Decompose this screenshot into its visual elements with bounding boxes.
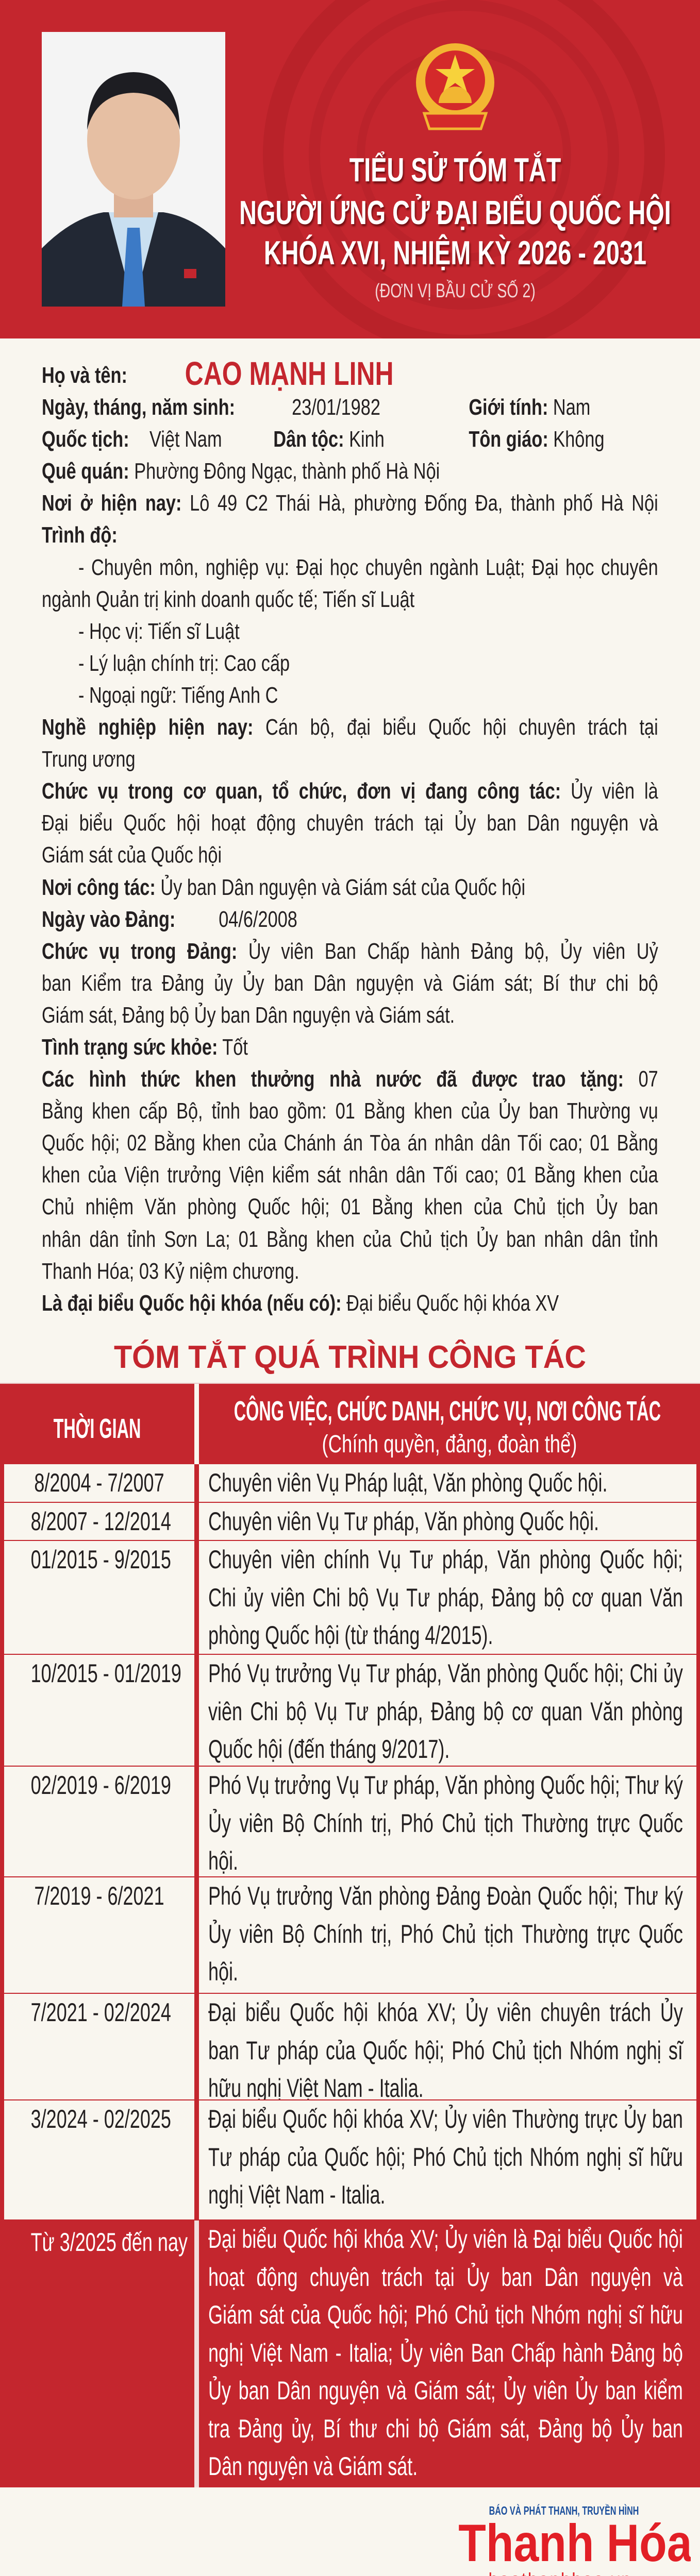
row 6: hội.: [208, 1957, 238, 1986]
row 6: [4, 1877, 696, 1994]
row 9: current (highlighted): hoạt động chuyên trách tại Ủy ban Dân nguyện và: [208, 2263, 683, 2292]
row 2: [4, 1503, 696, 1541]
row 2: Chuyên viên Vụ Tư pháp, Văn phòng Quốc hội.: [208, 1507, 599, 1536]
row 6: Phó Vụ trưởng Văn phòng Đảng Đoàn Quốc hội; Thư ký: [208, 1882, 683, 1910]
header band: [0, 0, 700, 338]
row 9: current (highlighted): Dân nguyện và Giám sát.: [208, 2452, 418, 2481]
party position: Chức vụ trong Đảng: Ủy viên Ban Chấp hành Đảng bộ, Ủy viên Uỷ: [42, 939, 658, 964]
birth date and gender: 23/01/1982: [292, 395, 380, 420]
party admission date: 04/6/2008: [219, 907, 297, 932]
title: [239, 151, 672, 273]
icon: national emblem: [416, 43, 494, 130]
row 9: current (highlighted): nghị Việt Nam - Italia; Ủy viên Ban Chấp hành Đảng bộ: [208, 2338, 683, 2367]
row 9: current (highlighted): Giám sát của Quốc hội; Phó Chủ tịch Nhóm nghị sĩ hữu: [208, 2300, 683, 2329]
row 9: current (highlighted): Từ 3/2025 đến nay: [31, 2228, 188, 2257]
panel: personal information: [42, 355, 658, 1316]
workplace: Nơi công tác: Ủy ban Dân nguyện và Giám sát của Quốc hội: [42, 875, 525, 900]
nationality, ethnicity, religion: Tôn giáo: Không: [469, 427, 605, 452]
panel: personal information: - Ngoại ngữ: Tiếng Anh C: [78, 683, 278, 708]
name: CAO MẠNH LINH: [185, 355, 394, 392]
row 8: [4, 2100, 696, 2221]
row 6: 7/2019 - 6/2021: [34, 1882, 164, 1910]
table: work history: [0, 1383, 700, 2221]
row 5: hội.: [208, 1846, 238, 1875]
panel: personal information: Thanh Hóa; 03 Kỷ niệm chương.: [42, 1259, 299, 1284]
row 9: current (highlighted): tra Đảng ủy, Bí thư chi bộ Giám sát, Đảng bộ Ủy ban: [208, 2414, 683, 2443]
title: KHÓA XVI, NHIỆM KỲ 2026 - 2031: [264, 234, 646, 272]
row 3: Chi ủy viên Chi bộ Vụ Tư pháp, Đảng bộ cơ quan Văn: [208, 1583, 683, 1612]
subtitle: electoral unit: (ĐƠN VỊ BẦU CỬ SỐ 2): [375, 280, 536, 302]
panel: personal information: Chủ nhiệm Văn phòng Quốc hội; 01 Bằng khen của Chủ tịch Ủy ban: [42, 1194, 658, 1219]
row 5: Phó Vụ trưởng Vụ Tư pháp, Văn phòng Quốc hội; Thư ký: [208, 1771, 683, 1800]
decorative drum circle: [263, 0, 665, 338]
row 9: current (highlighted): [0, 2221, 700, 2487]
row 1: Chuyên viên Vụ Pháp luật, Văn phòng Quốc hội.: [208, 1468, 608, 1497]
health: Tình trạng sức khỏe: Tốt: [42, 1035, 248, 1060]
row 8: Đại biểu Quốc hội khóa XV; Ủy viên Thường trực Ủy ban: [208, 2105, 683, 2133]
panel: personal information: - Chuyên môn, nghiệp vụ: Đại học chuyên ngành Luật; Đại học chuyên: [78, 555, 658, 580]
row 9: current (highlighted): Ủy ban Dân nguyện và Giám sát; Ủy viên Ủy ban kiểm: [208, 2376, 683, 2405]
panel: personal information: Giám sát của Quốc hội: [42, 842, 222, 868]
table header: (Chính quyền, đảng, đoàn thể): [322, 1431, 577, 1458]
row 8: nghị Việt Nam - Italia.: [208, 2180, 385, 2209]
panel: personal information: Giám sát, Đảng bộ Ủy ban Dân nguyện và Giám sát.: [42, 1003, 455, 1028]
name: [42, 355, 394, 392]
row 3: [4, 1541, 696, 1655]
row 7: ban Tư pháp của Quốc hội; Phó Chủ tịch Nhóm nghị sĩ: [208, 2036, 683, 2065]
heading: work history: TÓM TẮT QUÁ TRÌNH CÔNG TÁC: [114, 1340, 586, 1375]
position: Chức vụ trong cơ quan, tổ chức, đơn vị đang công tác: Ủy viên là: [42, 778, 658, 804]
nationality, ethnicity, religion: [42, 427, 605, 452]
photo: candidate portrait: [42, 32, 225, 307]
hometown: Quê quán: Phường Đông Ngạc, thành phố Hà Nội: [42, 459, 440, 484]
row 7: Đại biểu Quốc hội khóa XV; Ủy viên chuyên trách Ủy: [208, 1998, 683, 2027]
table body borders: [0, 1464, 4, 2222]
education: Trình độ:: [42, 522, 118, 548]
row 4: 10/2015 - 01/2019: [31, 1659, 181, 1688]
title: NGƯỜI ỨNG CỬ ĐẠI BIỂU QUỐC HỘI: [239, 194, 671, 231]
row 4: [4, 1655, 696, 1767]
row 1: [4, 1464, 696, 1503]
panel: personal information: Trung ương: [42, 747, 136, 772]
birth date and gender: [42, 395, 590, 420]
panel: personal information: khen của Viện trưởng Viện kiểm sát nhân dân Tối cao; 01 Bằng khen của: [42, 1162, 658, 1188]
awards: Các hình thức khen thưởng nhà nước đã được trao tặng: 07: [42, 1066, 658, 1092]
row 3: Chuyên viên chính Vụ Tư pháp, Văn phòng Quốc hội;: [208, 1545, 683, 1574]
party admission date: [42, 907, 297, 932]
table header: [0, 1383, 700, 1464]
table header: THỜI GIAN: [54, 1413, 141, 1444]
row 3: phòng Quốc hội (từ tháng 4/2015).: [208, 1621, 493, 1650]
previous NA term: Là đại biểu Quốc hội khóa (nếu có): Đại biểu Quốc hội khóa XV: [42, 1291, 559, 1316]
title: TIỂU SỬ TÓM TẮT: [349, 151, 561, 189]
nationality, ethnicity, religion: Quốc tịch:: [42, 427, 129, 452]
logo: Thanh Hoa newspaper: Thanh Hóa: [458, 2514, 691, 2572]
row 4: Phó Vụ trưởng Vụ Tư pháp, Văn phòng Quốc hội; Chi ủy: [208, 1659, 683, 1688]
row 2: 8/2007 - 12/2014: [31, 1507, 171, 1536]
row 5: Ủy viên Bộ Chính trị, Phó Chủ tịch Thường trực Quốc: [208, 1808, 683, 1837]
row 4: Quốc hội (đến tháng 9/2017).: [208, 1735, 449, 1764]
row 8: 3/2024 - 02/2025: [31, 2105, 171, 2133]
nationality, ethnicity, religion: Việt Nam: [149, 427, 222, 452]
panel: personal information: Đại biểu Quốc hội hoạt động chuyên trách tại Ủy ban Dân nguyện và: [42, 810, 658, 836]
residence: Nơi ở hiện nay: Lô 49 C2 Thái Hà, phường Đống Đa, thành phố Hà Nội: [42, 490, 658, 516]
row 9: current (highlighted): Đại biểu Quốc hội khóa XV; Ủy viên là Đại biểu Quốc hội: [208, 2225, 683, 2253]
panel: personal information: nhân dân tỉnh Sơn La; 01 Bằng khen của Chủ tịch Ủy ban nhân dân tỉnh: [42, 1227, 658, 1252]
nationality, ethnicity, religion: Dân tộc: Kinh: [273, 427, 385, 452]
panel: personal information: ngành Quản trị kinh doanh quốc tế; Tiến sĩ Luật: [42, 587, 414, 612]
row 6: Ủy viên Bộ Chính trị, Phó Chủ tịch Thường trực Quốc: [208, 1920, 683, 1948]
name: Họ và tên:: [42, 363, 127, 388]
row 7: 7/2021 - 02/2024: [31, 1998, 171, 2027]
birth date and gender: Giới tính: Nam: [469, 395, 590, 420]
logo: Thanh Hoa newspaper: BÁO VÀ PHÁT THANH, TRUYỀN HÌNH: [489, 2504, 639, 2517]
row 3: 01/2015 - 9/2015: [31, 1545, 171, 1574]
table header: CÔNG VIỆC, CHỨC DANH, CHỨC VỤ, NƠI CÔNG TÁC: [234, 1396, 661, 1427]
panel: personal information: Bằng khen cấp Bộ, tỉnh bao gồm: 01 Bằng khen của Ủy ban Thường vụ: [42, 1098, 658, 1124]
row 5: [4, 1767, 696, 1877]
birth date and gender: Ngày, tháng, năm sinh:: [42, 395, 235, 420]
row 8: Tư pháp của Quốc hội; Phó Chủ tịch Nhóm nghị sĩ hữu: [208, 2142, 683, 2171]
row 1: 8/2004 - 7/2007: [34, 1468, 164, 1497]
party admission date: Ngày vào Đảng:: [42, 907, 175, 932]
row 4: viên Chi bộ Vụ Tư pháp, Đảng bộ cơ quan Văn phòng: [208, 1697, 683, 1726]
panel: personal information: ban Kiểm tra Đảng ủy Ủy ban Dân nguyện và Giám sát; Bí thư chi bộ: [42, 971, 658, 996]
row 5: 02/2019 - 6/2019: [31, 1771, 171, 1800]
occupation: Nghề nghiệp hiện nay: Cán bộ, đại biểu Quốc hội chuyên trách tại: [42, 715, 658, 740]
panel: personal information: Quốc hội; 02 Bằng khen của Chánh án Tòa án nhân dân Tối cao; 01 Bằng: [42, 1130, 658, 1156]
panel: personal information: - Lý luận chính trị: Cao cấp: [78, 651, 290, 676]
row 7: [4, 1994, 696, 2100]
panel: personal information: - Học vị: Tiến sĩ Luật: [78, 619, 240, 644]
